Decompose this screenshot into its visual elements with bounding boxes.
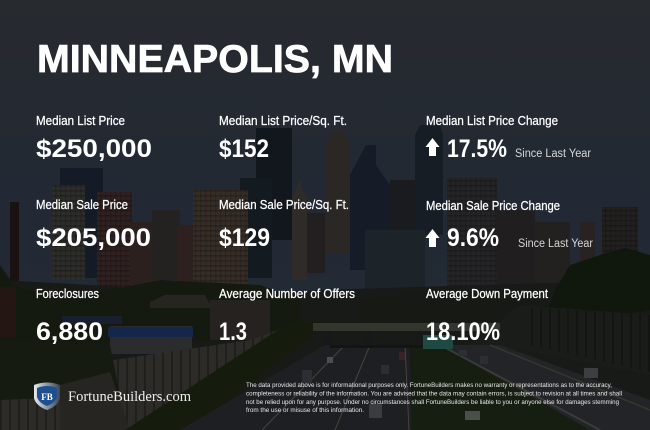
stat: median list price change [426,114,591,163]
stat: median list price change: 17.5% [447,135,507,163]
road lines [262,345,409,430]
far lanes [440,345,650,430]
stat: median sale price: $205,000 [36,224,151,252]
disclaimer: completeness or reliability of the information. You are advised that the data may contain errors, is subject to revision at all times and shall [246,390,622,398]
stat: median sale price change: Median Sale Price Change [426,199,560,213]
highway sign [423,335,453,349]
stat: median list price per sq ft: Median List Price/Sq. Ft. [219,114,347,128]
right embankment fence [470,305,650,375]
distant towers [240,125,638,310]
overpass bridge [313,323,500,331]
stat: median sale price per sq ft: $129 [219,224,270,252]
logo: FortuneBuilders: FortuneBuilders.com [68,389,191,405]
stat: foreclosures [36,287,103,346]
stat: foreclosures: Foreclosures [36,287,99,301]
stat: average number of offers: 1.3 [219,318,247,346]
stat: median list price change: Median List Price Change [426,114,558,128]
foreground buildings left [10,168,248,297]
icon: shield [34,382,60,410]
disclaimer [246,382,622,414]
stat: median sale price per sq ft [219,198,349,252]
stat: median sale price change: Since Last Year [518,238,593,250]
trees right [540,248,650,330]
stat: median list price per sq ft [219,114,347,163]
stat: average number of offers [219,287,355,346]
grass bank [125,322,330,430]
ground and low buildings [0,280,650,430]
sound wall [0,322,300,430]
stat: median sale price: Median Sale Price [36,198,128,212]
icon: up arrow [426,138,440,156]
logo: FortuneBuilders [34,382,191,410]
cars [302,350,598,418]
stat: median sale price [36,198,151,252]
stat: average number of offers: Average Number of Offers [219,287,355,301]
disclaimer: not be relied upon for any purpose. Under no circumstances shall FortuneBuilders be liable to you or anyone else for damages stemming [246,399,620,406]
icon: shield: FB [41,392,53,402]
stat: median sale price change [426,199,593,252]
disclaimer: from the use or misuse of this information. [246,407,364,414]
stat: median list price [36,114,152,163]
stat: foreclosures: 6,880 [36,318,103,346]
stat: median list price change: Since Last Year [515,148,591,160]
stat: average down payment [426,287,548,346]
stat: median list price per sq ft: $152 [219,135,269,163]
stat: median list price: Median List Price [36,114,125,128]
stat: average down payment: 18.10% [426,318,500,346]
icon: up arrow [426,229,440,247]
stat: median list price: $250,000 [36,135,152,163]
highway main lanes [180,345,412,430]
disclaimer: The data provided above is for informational purposes only. FortuneBuilders makes no warranty or representations as to the accuracy, [246,382,612,389]
stat: median sale price change: 9.6% [447,224,499,252]
title: MINNEAPOLIS, MN [37,38,393,81]
stat: average down payment: Average Down Payment [426,287,548,301]
grass median [412,345,600,430]
stat: median sale price per sq ft: Median Sale Price/Sq. Ft. [219,198,349,212]
